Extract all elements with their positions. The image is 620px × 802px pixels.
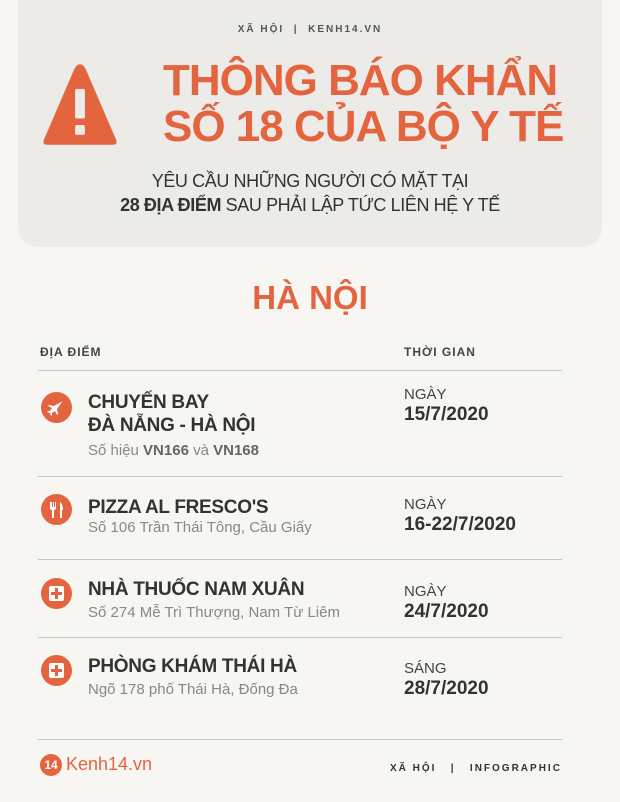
row 3: pharmacy: NGÀY: [404, 583, 447, 600]
row 4: clinic: 28/7/2020: [404, 678, 489, 699]
row 2: pizza: [41, 494, 516, 536]
row 2: pizza: NGÀY: [404, 496, 447, 513]
footer label: XÃ HỘI | INFOGRAPHIC: [390, 763, 562, 774]
footer logo: [40, 754, 152, 776]
row 3: pharmacy: 24/7/2020: [404, 601, 489, 622]
row 1: flight: Số hiệu VN166 và VN168: [88, 442, 259, 459]
row 1: flight: NGÀY: [404, 386, 447, 403]
row 2: pizza: 16-22/7/2020: [404, 514, 516, 535]
icon: plane: [41, 392, 72, 423]
table header: THỜI GIAN: [404, 345, 476, 359]
table header: ĐỊA ĐIỂM: [40, 345, 102, 359]
row 4: clinic: Ngõ 178 phố Thái Hà, Đống Đa: [88, 681, 298, 698]
title: [163, 56, 563, 151]
row 2: pizza: PIZZA AL FRESCO'S: [88, 497, 268, 518]
city heading: HÀ NỘI: [252, 279, 368, 316]
footer logo: 14: [44, 758, 58, 772]
subtitle: YÊU CẦU NHỮNG NGƯỜI CÓ MẶT TẠI: [152, 171, 468, 191]
icon: fork and knife: [41, 494, 72, 525]
row 3: pharmacy: NHÀ THUỐC NAM XUÂN: [88, 579, 304, 600]
icon: medical cross: [41, 655, 72, 686]
row 1: flight: 15/7/2020: [404, 404, 489, 425]
row 4: clinic: SÁNG: [404, 660, 447, 677]
icon: warning triangle: [44, 64, 116, 145]
row 1: flight: CHUYẾN BAY: [88, 392, 209, 413]
row 4: clinic: [41, 654, 489, 699]
row 3: pharmacy: [41, 578, 489, 622]
header panel: [18, 0, 602, 247]
row 4: clinic: PHÒNG KHÁM THÁI HÀ: [88, 656, 297, 677]
icon: medical cross: [41, 578, 72, 609]
footer logo: Kenh14.vn: [66, 754, 152, 774]
subtitle: [120, 170, 500, 215]
subtitle: 28 ĐỊA ĐIỂM SAU PHẢI LẬP TỨC LIÊN HỆ Y TẾ: [120, 195, 500, 215]
row 1: flight: ĐÀ NẴNG - HÀ NỘI: [88, 415, 255, 436]
row 3: pharmacy: Số 274 Mễ Trì Thượng, Nam Từ Liêm: [88, 604, 340, 621]
title: SỐ 18 CỦA BỘ Y TẾ: [163, 102, 563, 151]
row 1: flight: [41, 386, 489, 459]
section label: XÃ HỘI | KENH14.VN: [238, 24, 382, 35]
table header: [40, 345, 476, 359]
title: THÔNG BÁO KHẨN: [163, 56, 557, 105]
row 2: pizza: Số 106 Trần Thái Tông, Cầu Giấy: [88, 519, 312, 536]
